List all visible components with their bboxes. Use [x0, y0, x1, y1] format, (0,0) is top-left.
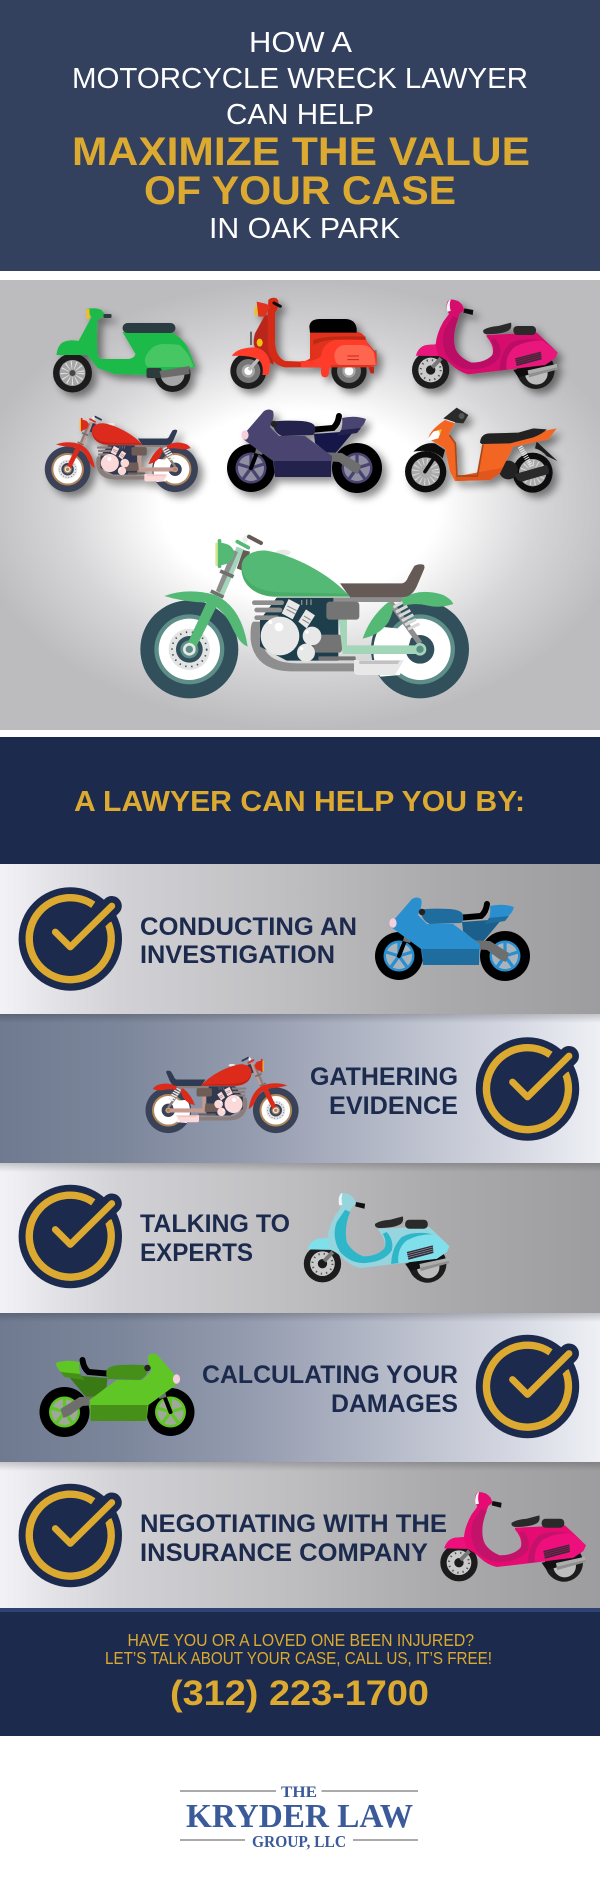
text: conducting an investigation: INVESTIGATION [140, 941, 335, 969]
text: negotiating with the insurance company [140, 1510, 447, 1567]
icon: red cafe racer [45, 416, 198, 492]
icon: red scooter [230, 298, 377, 389]
phone number: (312) 223-1700 [170, 1674, 429, 1713]
text: conducting an investigation [140, 913, 357, 969]
text: calculating your damages [202, 1361, 458, 1418]
icon: check [19, 1185, 122, 1288]
text: calculating your damages: CALCULATING YOUR [202, 1361, 458, 1389]
panel: gathering evidence [0, 1014, 600, 1163]
icon: green scooter [53, 308, 196, 392]
title: IN OAK PARK [209, 213, 401, 245]
text: gathering evidence: GATHERING [310, 1063, 458, 1091]
text: gathering evidence: EVIDENCE [329, 1092, 458, 1120]
title [72, 27, 530, 245]
panel: call to action [0, 1608, 600, 1736]
icon: blue sport bike [375, 898, 530, 981]
panel: conducting an investigation [0, 864, 600, 1014]
text: calculating your damages: DAMAGES [331, 1390, 458, 1418]
title: MOTORCYCLE WRECK LAWYER [72, 63, 528, 95]
icon: check [19, 887, 122, 991]
logo: The Kryder Law Group, LLC: GROUP, LLC [252, 1832, 346, 1851]
text: talking to experts: EXPERTS [140, 1239, 253, 1267]
icon: check [476, 1335, 579, 1438]
text: call to action: LET’S TALK ABOUT YOUR CASE, CALL US, IT’S FREE! [105, 1648, 492, 1668]
text: negotiating with the insurance company: NEGOTIATING WITH THE [140, 1510, 447, 1538]
panel: calculating your damages [0, 1313, 600, 1462]
title: MAXIMIZE THE VALUE [72, 130, 530, 174]
text: conducting an investigation: CONDUCTING AN [140, 913, 357, 941]
icon: teal scooter [304, 1193, 449, 1283]
heading: A LAWYER CAN HELP YOU BY: [74, 786, 525, 818]
icon: check [476, 1037, 579, 1141]
text: call to action: HAVE YOU OR A LOVED ONE BEEN INJURED? [128, 1630, 474, 1650]
text: talking to experts [140, 1210, 290, 1267]
header panel [0, 0, 600, 271]
panel: talking to experts [0, 1163, 600, 1313]
text: gathering evidence [310, 1063, 458, 1120]
icon: pink scooter [412, 299, 558, 389]
icon: pink scooter [440, 1492, 586, 1582]
icon: purple sport bike [227, 410, 382, 493]
text: negotiating with the insurance company: INSURANCE COMPANY [140, 1539, 428, 1567]
panel: negotiating with the insurance company [0, 1462, 600, 1608]
icon: large green cafe racer [140, 535, 469, 698]
text: talking to experts: TALKING TO [140, 1210, 290, 1238]
panel: motorcycles [0, 280, 600, 730]
title: HOW A [249, 27, 353, 59]
icon: check [19, 1484, 122, 1587]
text: call to action [105, 1630, 492, 1668]
logo: The Kryder Law Group, LLC: KRYDER LAW [186, 1798, 413, 1835]
title: CAN HELP [226, 99, 374, 131]
title: OF YOUR CASE [144, 169, 456, 213]
panel: lawyer can help heading [0, 737, 600, 864]
icon: green sport bike [40, 1354, 194, 1437]
icon: orange scooter [405, 408, 557, 493]
icon: red cafe racer [145, 1057, 299, 1133]
logo: The Kryder Law Group, LLC [180, 1784, 418, 1851]
logo: The Kryder Law Group, LLC: THE [281, 1784, 317, 1801]
